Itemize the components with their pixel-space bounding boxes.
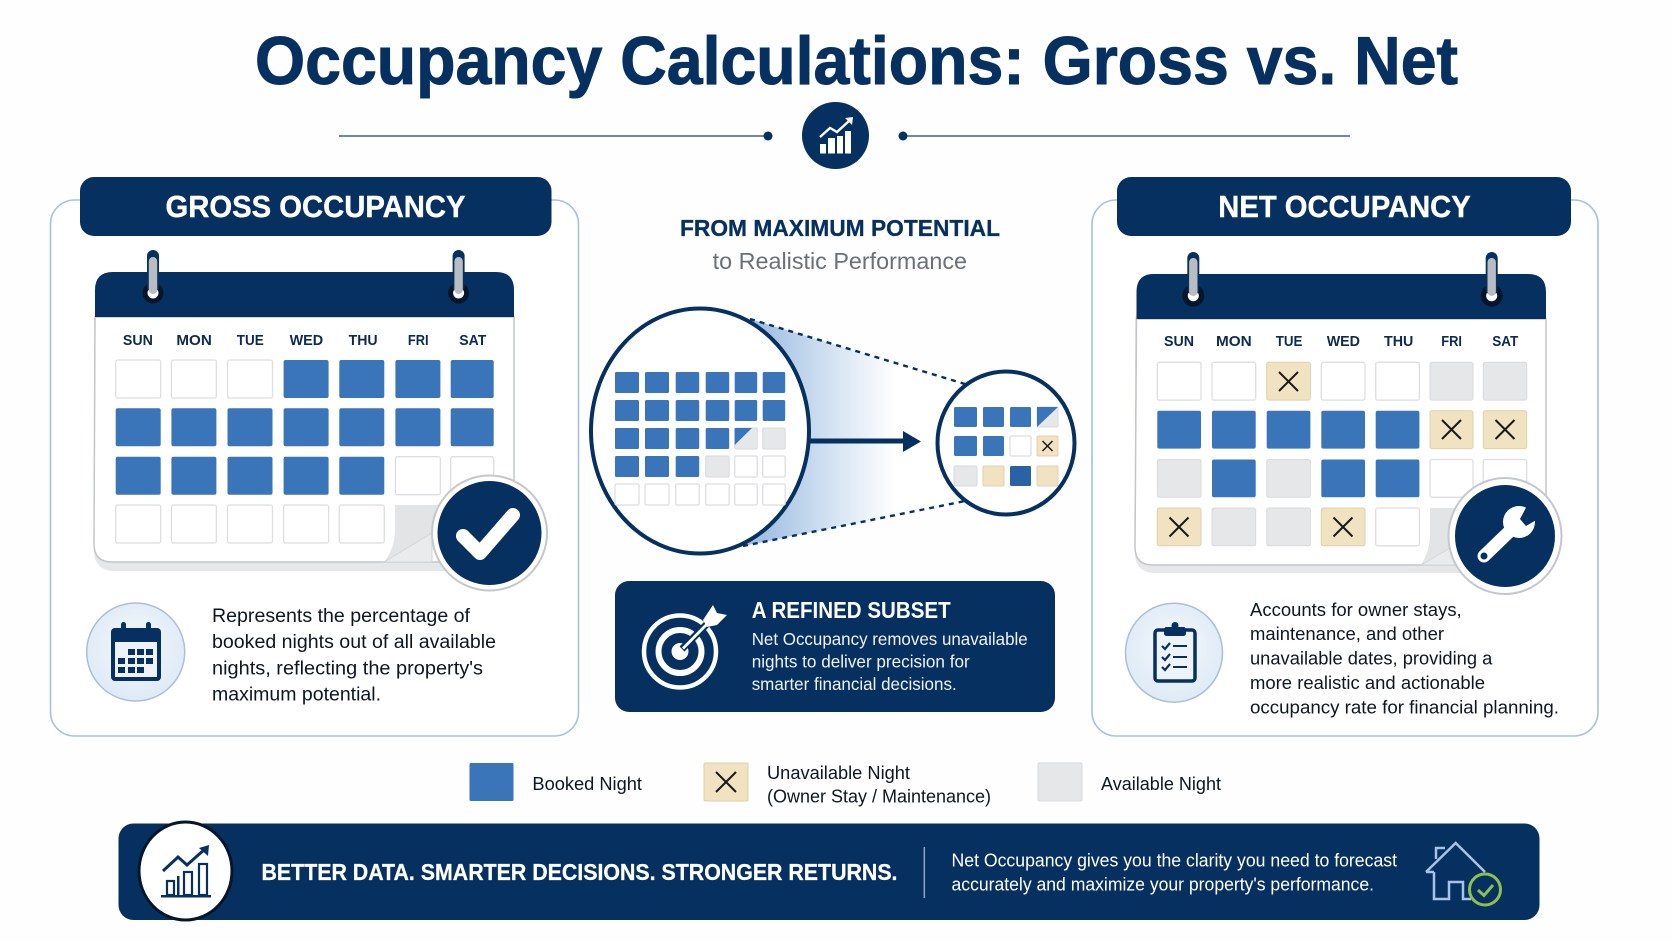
calendar: net: SAT: [1492, 333, 1518, 350]
icon: clipboard checklist: [1126, 603, 1222, 702]
bottom banner: Net Occupancy gives you the clarity you need to forecast: [952, 850, 1397, 870]
text: net description: occupancy rate for financial planning.: [1250, 696, 1559, 718]
big circle: full calendar: [591, 308, 809, 554]
badge: check mark: [432, 476, 547, 590]
calendar: net: MON: [1216, 333, 1252, 350]
text: gross description: nights, reflecting the property's: [212, 658, 483, 680]
calendar: gross: SUN: [123, 332, 153, 349]
legend: [470, 762, 1221, 806]
legend item: booked night: Booked Night: [532, 773, 642, 794]
callout: a refined subset: A REFINED SUBSET: [752, 597, 951, 623]
calendar: gross: MON: [176, 332, 212, 349]
heading: gross occupancy: [80, 177, 552, 236]
legend item: unavailable night: Unavailable Night: [767, 762, 910, 783]
legend item: unavailable night: [704, 762, 991, 806]
calendar: gross: [94, 250, 514, 571]
arrow: [810, 431, 921, 452]
text: gross description: Represents the percentage of: [212, 606, 471, 627]
heading: gross occupancy: GROSS OCCUPANCY: [166, 189, 466, 224]
calendar: net: [1135, 252, 1546, 573]
calendar: net: THU: [1384, 333, 1413, 350]
legend item: available night: [1038, 763, 1221, 801]
center heading: [680, 215, 1000, 274]
bottom banner: accurately and maximize your property's performance.: [952, 874, 1374, 894]
text: net description: Accounts for owner stays,: [1250, 599, 1462, 620]
callout: a refined subset: nights to deliver precision for: [752, 652, 970, 672]
legend item: unavailable night: (Owner Stay / Maintenance): [767, 786, 991, 806]
calendar: gross: FRI: [408, 332, 429, 349]
bottom banner: BETTER DATA. SMARTER DECISIONS. STRONGER RETURNS.: [262, 859, 898, 885]
calendar: gross: THU: [349, 332, 378, 349]
center heading: to Realistic Performance: [713, 248, 967, 274]
calendar: net: TUE: [1276, 333, 1302, 350]
calendar: gross: TUE: [237, 332, 264, 349]
bottom banner: [118, 822, 1540, 920]
callout: a refined subset: smarter financial decisions.: [752, 674, 957, 694]
badge: wrench: [1448, 478, 1562, 594]
panel: net occupancy: [1092, 177, 1598, 736]
text: net description: unavailable dates, providing a: [1250, 648, 1493, 668]
center heading: FROM MAXIMUM POTENTIAL: [680, 215, 1000, 241]
small circle: refined calendar: [938, 372, 1074, 514]
text: gross description: [212, 606, 496, 706]
calendar: net: SUN: [1164, 333, 1194, 350]
icon: growth chart: [139, 822, 232, 920]
title divider with chart icon: [339, 102, 1350, 169]
text: gross description: booked nights out of all available: [212, 632, 496, 653]
title: Occupancy Calculations: Gross vs. Net: [255, 23, 1458, 99]
magnifier diagram: [591, 308, 1074, 554]
icon: house with check: [1426, 843, 1500, 905]
calendar: net: FRI: [1441, 333, 1462, 350]
legend item: booked night: [470, 763, 642, 801]
legend item: available night: Available Night: [1101, 773, 1221, 794]
text: gross description: maximum potential.: [212, 684, 381, 706]
text: net description: [1250, 599, 1559, 718]
calendar: gross: SAT: [459, 332, 486, 349]
heading: net occupancy: NET OCCUPANCY: [1218, 189, 1471, 224]
text: net description: maintenance, and other: [1250, 623, 1444, 644]
panel: gross occupancy: [50, 177, 578, 736]
heading: net occupancy: [1117, 177, 1571, 236]
calendar: gross: WED: [290, 332, 323, 349]
text: net description: more realistic and actionable: [1250, 672, 1485, 693]
icon: calendar: [87, 603, 185, 701]
icon: target with arrow: [644, 605, 727, 688]
calendar: net: WED: [1327, 333, 1360, 350]
callout: a refined subset: Net Occupancy removes unavailable: [752, 629, 1028, 649]
callout: a refined subset: [615, 581, 1055, 712]
